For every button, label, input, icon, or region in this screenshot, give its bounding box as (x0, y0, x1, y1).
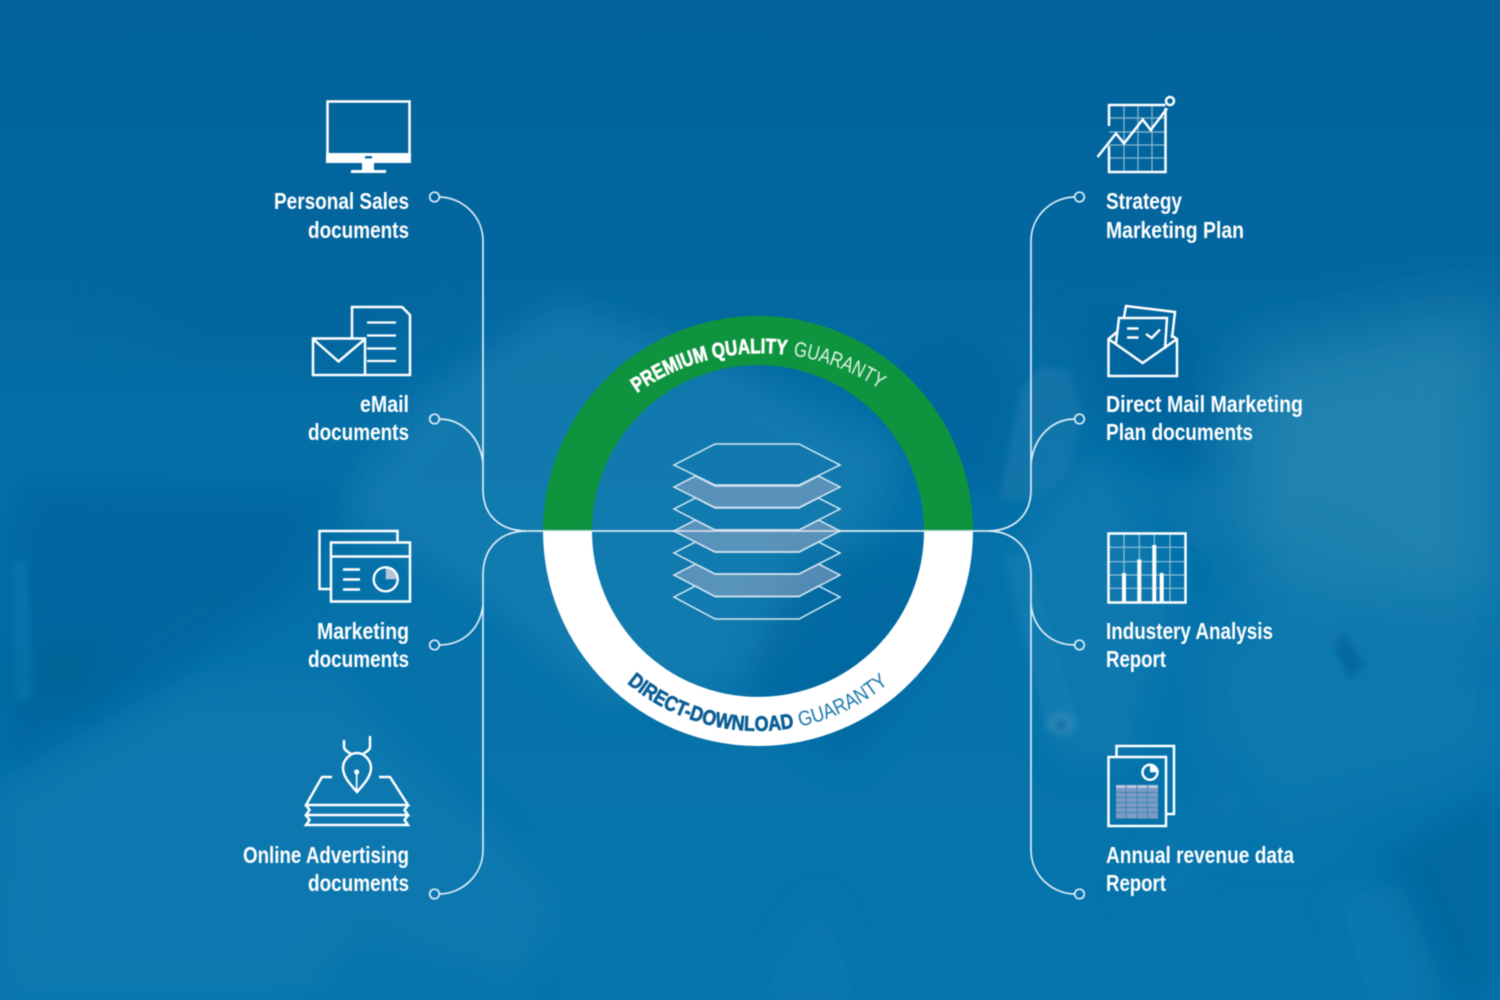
icon: browser windows with pie chart (320, 531, 410, 602)
lower-left paper (0, 670, 560, 1000)
item: Personal Sales documents (274, 102, 411, 243)
label (274, 188, 409, 243)
item: Strategy Marketing Plan (1098, 97, 1244, 243)
label (243, 842, 409, 896)
label: eMail (360, 391, 409, 417)
lower-right strokes (1380, 790, 1500, 1000)
left connectors (430, 192, 527, 899)
icon: bar chart on grid (1108, 534, 1186, 602)
icon: envelope and document (313, 307, 410, 375)
horizontal divider (527, 530, 987, 532)
icon: stacked hexagon layers (674, 444, 840, 619)
item: Marketing documents (308, 531, 410, 672)
label: Report (1106, 646, 1166, 672)
dark wedge left (0, 480, 340, 775)
central guarantee ring (526, 315, 988, 747)
item: Industery Analysis Report (1106, 534, 1273, 672)
item: Direct Mail Marketing Plan documents (1106, 306, 1303, 445)
hand and fingers (1000, 366, 1082, 500)
label (1106, 188, 1244, 243)
label: Direct Mail Marketing (1106, 391, 1303, 417)
ring label: premium quality guaranty: PREMIUM QUALITY GUARANTY (628, 338, 888, 394)
ring label: direct-download guaranty: DIRECT-DOWNLOAD GUARANTY (626, 672, 885, 732)
label: Report (1106, 870, 1166, 896)
light right area (1230, 300, 1500, 620)
label: Marketing Plan (1106, 217, 1244, 243)
paper sheet behind ring (340, 300, 900, 700)
label (1106, 842, 1294, 896)
connector lines (430, 192, 1084, 899)
icon: open envelope with letters (1108, 306, 1177, 376)
label: Annual revenue data (1106, 842, 1294, 868)
label (308, 618, 409, 672)
label: Plan documents (1106, 419, 1253, 445)
label: documents (308, 870, 409, 896)
dark inside lower right of ring (740, 540, 950, 760)
item: eMail documents (308, 307, 410, 445)
label: documents (308, 646, 409, 672)
icon: report pages with table and pie (1108, 746, 1174, 826)
label: Marketing (317, 618, 409, 644)
label (308, 391, 409, 445)
label: Personal Sales (274, 188, 409, 214)
pen (1005, 555, 1078, 735)
icon: growth chart on grid (1098, 97, 1174, 172)
ring: white download half (543, 531, 973, 746)
ring: green premium half (543, 316, 973, 531)
item: Annual revenue data Report (1106, 746, 1294, 896)
item: Online Advertising documents (243, 736, 409, 896)
icon: pen nib over paper stack (306, 736, 408, 825)
label (1106, 618, 1273, 672)
icon: desktop monitor (326, 102, 411, 173)
label: Strategy (1106, 188, 1182, 214)
label: documents (308, 217, 409, 243)
label: Online Advertising (243, 842, 409, 868)
upper-left dark smudge (130, 270, 400, 350)
right connectors (987, 192, 1084, 899)
label: Industery Analysis (1106, 618, 1273, 644)
label: documents (308, 419, 409, 445)
label (1106, 391, 1303, 445)
